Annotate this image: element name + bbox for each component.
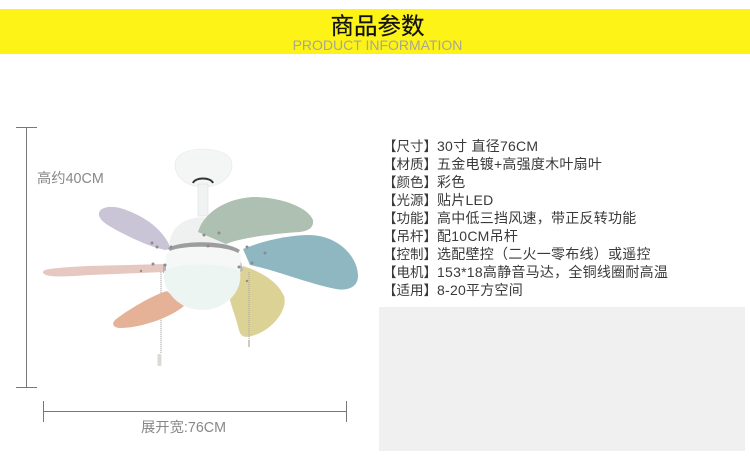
blade: yellow <box>230 266 285 337</box>
pull chain right <box>248 272 250 347</box>
spec: applicable area: 8-20平方空间 <box>437 282 523 298</box>
ceiling fan <box>43 149 358 366</box>
blade: orange <box>113 291 184 328</box>
spec: material: 【材质】 <box>383 157 437 172</box>
spec: applicable area: 【适用】 <box>383 283 437 298</box>
spec: applicable area <box>383 282 523 298</box>
spec: colour: 【颜色】 <box>383 175 437 190</box>
spec: control: 【控制】 <box>383 247 437 262</box>
title: 商品参数 <box>330 13 424 39</box>
spec: light source: 【光源】 <box>383 193 437 208</box>
blade screws <box>140 232 266 282</box>
spec: size: 【尺寸】 <box>383 139 437 154</box>
downrod <box>198 184 208 216</box>
spec: rod: 【吊杆】 <box>383 229 437 244</box>
spec: rod <box>383 228 518 244</box>
blade: lilac <box>99 207 171 250</box>
subtitle: PRODUCT INFORMATION <box>293 37 462 53</box>
spec: size: 30寸 直径76CM <box>437 138 538 154</box>
spec: light source <box>383 192 493 208</box>
chrome ring <box>168 242 240 253</box>
spec: colour <box>383 174 466 190</box>
spec: rod: 配10CM吊杆 <box>437 228 518 244</box>
chain end right <box>248 340 250 347</box>
spec: size <box>383 138 538 154</box>
spec list <box>383 138 668 298</box>
spec: colour: 彩色 <box>437 174 466 190</box>
width bracket <box>44 401 346 422</box>
height bracket <box>16 128 37 388</box>
spec: function: 高中低三挡风速，带正反转功能 <box>437 210 636 226</box>
spec: light source: 贴片LED <box>437 192 493 208</box>
canopy <box>175 149 232 187</box>
light housing <box>166 245 241 274</box>
spec: function: 【功能】 <box>383 211 437 226</box>
spec: motor: 【电机】 <box>383 265 437 280</box>
width label: 展开宽:76CM <box>141 420 226 436</box>
header band <box>0 9 750 54</box>
blade: green <box>198 197 313 244</box>
pull chain left <box>158 272 162 366</box>
glass shade <box>164 264 240 310</box>
spec: control: 选配壁控（二火一零布线）或遥控 <box>437 246 651 262</box>
motor housing <box>169 217 228 250</box>
spec: material: 五金电镀+高强度木叶扇叶 <box>437 156 602 172</box>
height label: 高约40CM <box>37 171 104 187</box>
blade: pink <box>43 264 165 276</box>
spec: motor: 153*18高静音马达，全铜线圈耐高温 <box>437 264 668 280</box>
blade: blue <box>243 235 358 290</box>
arm brackets <box>163 262 243 274</box>
grey blank panel <box>379 307 745 451</box>
